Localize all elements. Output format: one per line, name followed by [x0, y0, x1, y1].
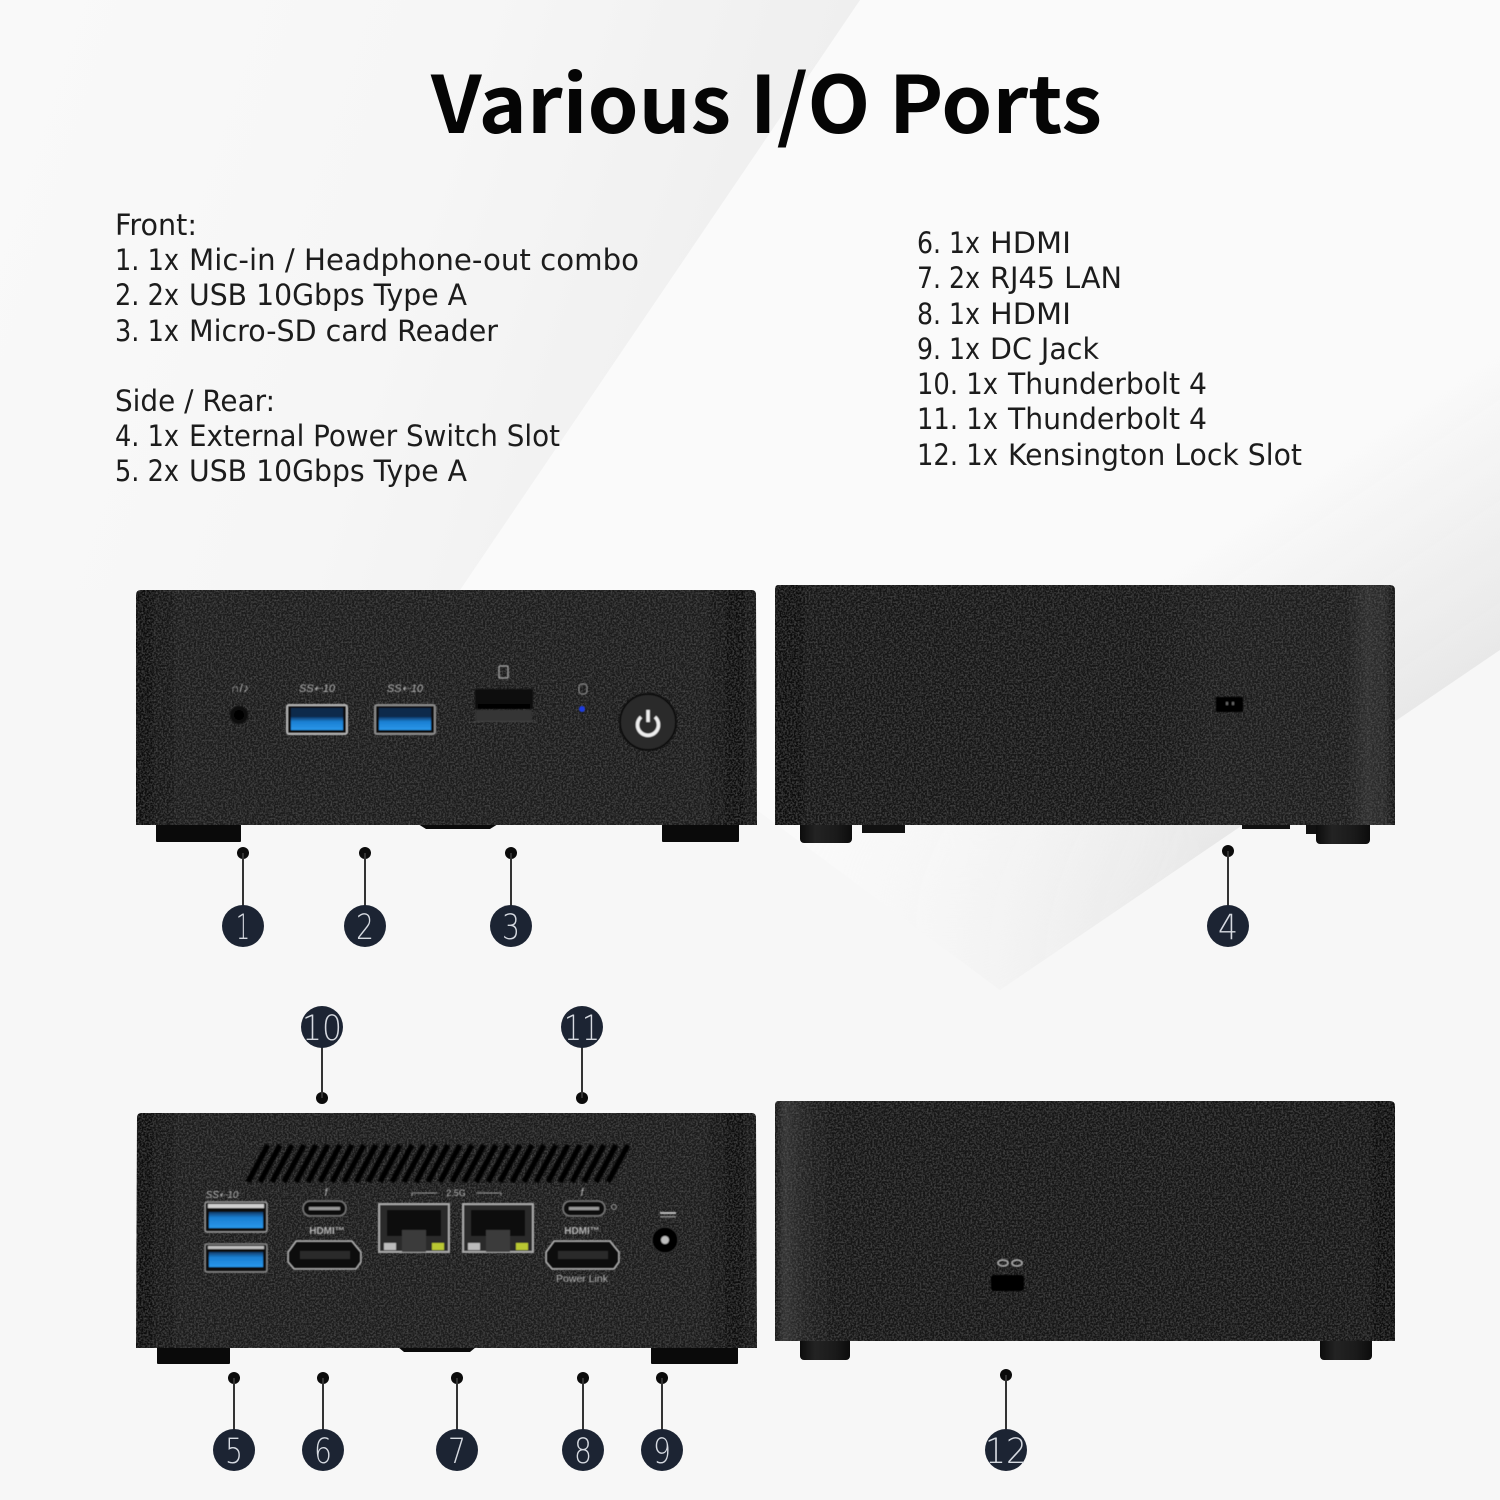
- text block: front and side ports: 2. 2x: [115, 278, 179, 312]
- text block: front and side ports: Micro-SD card Reader: [189, 314, 498, 348]
- power button: [620, 694, 676, 750]
- thunderbolt port right: [563, 1187, 616, 1216]
- lan ports: 2.5G: [446, 1188, 466, 1198]
- micro-sd slot: [473, 666, 533, 722]
- text block: rear ports: 11. 1x: [917, 402, 998, 436]
- text block: rear ports: HDMI: [990, 297, 1071, 331]
- callout 4: 4: [1218, 908, 1238, 948]
- callout 1: [222, 847, 264, 948]
- ventilation slots: [248, 1145, 628, 1182]
- text block: rear ports: 10. 1x: [917, 367, 998, 401]
- text block: rear ports: 6. 1x: [917, 226, 980, 260]
- device: side view with switch slot: [775, 585, 1395, 844]
- status led: [579, 684, 587, 712]
- hdmi port right: Power Link: [556, 1273, 609, 1285]
- usb port B: SS⇠10: [387, 683, 424, 695]
- callout 10: 10: [302, 1009, 342, 1049]
- hdmi port left: HDMI™: [309, 1226, 345, 1237]
- text block: front and side ports: 4. 1x: [115, 419, 179, 453]
- callout 8: 8: [574, 1432, 592, 1472]
- text block: rear ports: Kensington Lock Slot: [1008, 438, 1302, 472]
- hdmi port right: [546, 1226, 619, 1285]
- callout 7: 7: [448, 1432, 466, 1472]
- text block: front and side ports: External Power Switch Slot: [189, 419, 560, 453]
- callout 12: 12: [985, 1432, 1027, 1472]
- text block: front and side ports: USB 10Gbps Type A: [189, 454, 467, 488]
- audio jack: [230, 681, 249, 724]
- thunderbolt port left: [303, 1187, 346, 1216]
- callout 6: 6: [314, 1432, 332, 1472]
- text block: rear ports: HDMI: [990, 226, 1071, 260]
- callout 11: 11: [564, 1009, 600, 1049]
- text block: rear ports: 8. 1x: [917, 297, 980, 331]
- callout 2: 2: [356, 908, 374, 948]
- text block: rear ports: Thunderbolt 4: [1007, 402, 1207, 436]
- callout 11: [561, 1006, 603, 1104]
- lan ports: [379, 1188, 533, 1252]
- text block: front and side ports: Side / Rear:: [115, 384, 275, 418]
- hdmi port left: [288, 1226, 361, 1269]
- feet: [156, 824, 739, 842]
- callout 2: [344, 847, 386, 948]
- title: Various I/O Ports: [430, 41, 1102, 156]
- usb port B: [375, 683, 435, 734]
- dc jack: [652, 1212, 678, 1253]
- callout 7: [436, 1372, 478, 1472]
- device: rear view: [136, 1113, 757, 1364]
- text block: rear ports: 9. 1x: [917, 332, 980, 366]
- text block: front and side ports: Front:: [115, 208, 197, 242]
- text block: front and side ports: 5. 2x: [115, 454, 179, 488]
- callout 12: [985, 1369, 1027, 1472]
- callout 5: [213, 1372, 255, 1472]
- callout 10: [301, 1006, 343, 1104]
- callout 4: [1207, 845, 1249, 948]
- text block: rear ports: [917, 226, 1302, 472]
- callout 5: 5: [225, 1432, 243, 1472]
- text block: rear ports: 7. 2x: [917, 261, 980, 295]
- text block: rear ports: DC Jack: [990, 332, 1099, 366]
- chassis: [136, 590, 757, 825]
- callout 9: [641, 1372, 683, 1472]
- thunderbolt port right: f: [580, 1187, 584, 1199]
- device: front view: [136, 590, 757, 842]
- device: side view with lock slot: [775, 1101, 1395, 1360]
- kensington lock slot: [991, 1260, 1024, 1291]
- callout 9: 9: [653, 1432, 671, 1472]
- chassis: [136, 1113, 757, 1348]
- callout 3: 3: [502, 908, 520, 948]
- usb ports: SS⇠10: [206, 1190, 239, 1201]
- usb port A: SS⇠10: [299, 683, 336, 695]
- text block: front and side ports: USB 10Gbps Type A: [189, 278, 467, 312]
- callout 8: [562, 1372, 604, 1472]
- text block: rear ports: 12. 1x: [917, 438, 998, 472]
- text block: front and side ports: 1. 1x: [115, 243, 179, 277]
- callout 3: [490, 847, 532, 948]
- text block: rear ports: Thunderbolt 4: [1007, 367, 1207, 401]
- hdmi port right: HDMI™: [564, 1226, 600, 1237]
- text block: front and side ports: [115, 208, 639, 488]
- usb port A: [287, 683, 347, 734]
- external power switch slot: [1216, 697, 1243, 712]
- chassis: [775, 1101, 1395, 1341]
- chassis: [775, 585, 1395, 825]
- usb ports: [205, 1190, 267, 1272]
- thunderbolt port left: f: [324, 1187, 328, 1199]
- audio jack: ∩/♪: [231, 681, 249, 695]
- feet: [800, 820, 1370, 844]
- text block: front and side ports: 3. 1x: [115, 314, 179, 348]
- text block: front and side ports: Mic-in / Headphone-out combo: [189, 243, 639, 277]
- feet: [157, 1347, 738, 1364]
- background: soft light geometric facets: [1089, 545, 1500, 926]
- feet: [800, 1336, 1372, 1360]
- callout 1: 1: [236, 908, 250, 948]
- text block: rear ports: RJ45 LAN: [990, 261, 1122, 295]
- callout 6: [302, 1372, 344, 1472]
